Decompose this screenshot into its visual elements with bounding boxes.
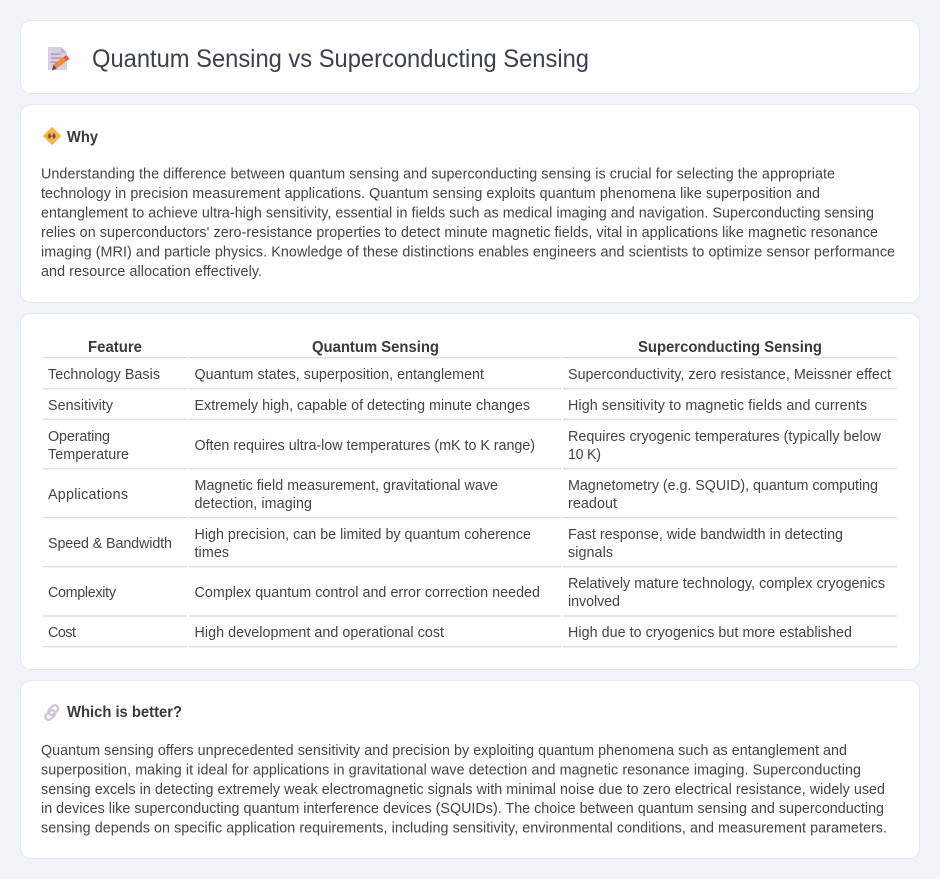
- row: operating temperature: 10 K): [568, 447, 601, 463]
- row: speed and bandwidth: High precision, can be limited by quantum coherence: [194, 527, 531, 543]
- panel: why: [20, 104, 920, 302]
- text block: which is better paragraph: sensing depends on specific application requirements, including sensitivity, environmental conditions, and measurement parameters.: [41, 820, 887, 836]
- text block: which is better paragraph: superposition, making it ideal for applications in gravitational wave detection and magnetic resonance imaging. Superconducting: [41, 762, 861, 778]
- row: speed and bandwidth: signals: [568, 545, 613, 561]
- row: sensitivity: [48, 398, 867, 414]
- row: operating temperature: Often requires ultra-low temperatures (mK to K range): [194, 438, 535, 454]
- title text: Quantum Sensing vs Superconducting Sensing: [92, 45, 589, 73]
- row: technology basis: Superconductivity, zero resistance, Meissner effect: [568, 367, 891, 383]
- row: sensitivity: Sensitivity: [48, 398, 114, 414]
- row: technology basis: [48, 367, 891, 383]
- heading: why: Why: [67, 129, 98, 146]
- text block: why paragraph: Understanding the difference between quantum sensing and superconducting sensing is crucial for selecting the appropriate: [41, 166, 835, 182]
- row: complexity: involved: [568, 594, 620, 610]
- table header: [88, 339, 822, 356]
- row: technology basis: Quantum states, superposition, entanglement: [194, 367, 484, 383]
- text block: why paragraph: imaging (MRI) and particle physics. Knowledge of these distinctions enables engineers and scientists to optimize sensor performance: [41, 244, 895, 260]
- row: speed and bandwidth: Fast response, wide bandwidth in detecting: [568, 527, 843, 543]
- panel: which is better: [20, 680, 920, 858]
- row: operating temperature: Operating: [48, 429, 110, 445]
- table header: Superconducting Sensing: [638, 339, 822, 356]
- text block: which is better paragraph: [41, 743, 887, 836]
- heading: which is better: Which is better?: [67, 704, 182, 721]
- row: applications: Applications: [48, 487, 128, 503]
- text block: which is better paragraph: in devices like superconducting quantum interference devices (SQUIDs). The choice between quantum sensing and superconducting: [41, 801, 884, 817]
- row: complexity: Complexity: [48, 585, 117, 601]
- icon: memo with pencil: [48, 47, 70, 70]
- icon: orange diamond sign: [44, 128, 60, 144]
- row: complexity: Complex quantum control and error correction needed: [194, 585, 540, 601]
- panel: title: [20, 20, 920, 94]
- row: applications: Magnetometry (e.g. SQUID), quantum computing: [568, 478, 878, 494]
- table rules: [43, 357, 897, 647]
- row: speed and bandwidth: [48, 527, 843, 561]
- row: operating temperature: Requires cryogenic temperatures (typically below: [568, 429, 882, 445]
- row: applications: Magnetic field measurement, gravitational wave: [194, 478, 498, 494]
- row: speed and bandwidth: Speed & Bandwidth: [48, 536, 172, 552]
- row: cost: [48, 625, 852, 641]
- text block: why paragraph: [41, 166, 895, 280]
- table header: Quantum Sensing: [312, 339, 439, 356]
- row: technology basis: Technology Basis: [48, 367, 160, 383]
- row: operating temperature: Temperature: [48, 447, 129, 463]
- row: cost: High development and operational cost: [194, 625, 444, 641]
- row: sensitivity: Extremely high, capable of detecting minute changes: [194, 398, 530, 414]
- row: complexity: [48, 576, 885, 610]
- text block: why paragraph: technology in precision measurement applications. Quantum sensing exploits quantum phenomena like superposition and: [41, 186, 820, 202]
- text block: why paragraph: entanglement to achieve ultra-high sensitivity, essential in fields such as medical imaging and navigation. Superconducting sensing: [41, 206, 874, 222]
- row: speed and bandwidth: times: [194, 545, 229, 561]
- text block: which is better paragraph: Quantum sensing offers unprecedented sensitivity and precision by exploiting quantum phenomena such as entanglement and: [41, 743, 847, 759]
- row: applications: detection, imaging: [194, 496, 312, 512]
- row: applications: readout: [568, 496, 617, 512]
- row: complexity: Relatively mature technology, complex cryogenics: [568, 576, 885, 592]
- text block: which is better paragraph: sensing excels in detecting extremely weak electromagnetic signals with minimal noise due to zero electrical resistance, widely used: [41, 782, 885, 798]
- text block: why paragraph: and resource allocation effectively.: [41, 264, 262, 280]
- row: cost: High due to cryogenics but more established: [568, 625, 852, 641]
- row: applications: [48, 478, 878, 512]
- icon: link: [44, 704, 59, 721]
- text block: why paragraph: relies on superconductors' zero-resistance properties to detect minute magnetic fields, vital in applications like magnetic resonance: [41, 225, 878, 241]
- row: sensitivity: High sensitivity to magnetic fields and currents: [568, 398, 867, 414]
- table header: Feature: [88, 339, 142, 356]
- panel: comparison table: [20, 314, 920, 670]
- row: cost: Cost: [48, 625, 76, 641]
- row: operating temperature: [48, 429, 882, 463]
